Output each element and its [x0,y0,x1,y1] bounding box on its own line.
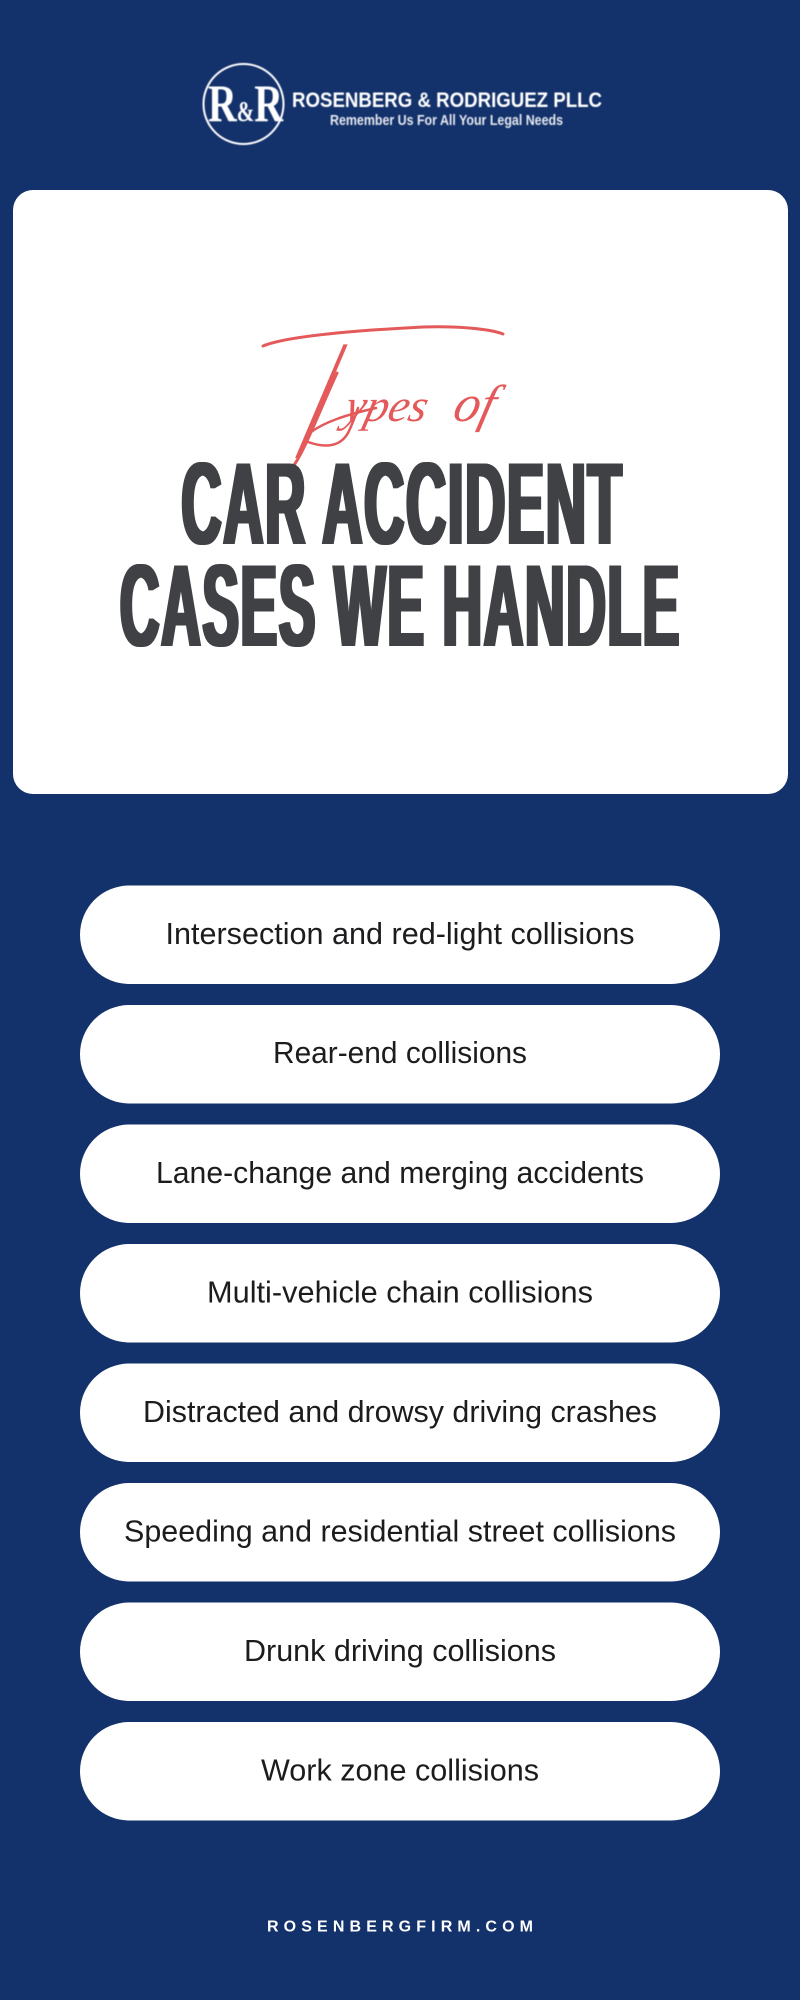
pill: distracted [80,1364,720,1462]
pill: drunk driving: Drunk driving collisions [244,1633,556,1668]
pill: work zone [80,1722,720,1820]
pill: lane-change [80,1124,720,1223]
pill: speeding [80,1483,720,1582]
decorative swash across the script heading [263,327,503,465]
firm name: ROSENBERG & RODRIGUEZ PLLC [292,89,602,112]
pill: intersection: Intersection and red-light collisions [166,916,634,951]
list of accident case types [80,886,720,1820]
pill: distracted: Distracted and drowsy driving crashes [143,1394,657,1429]
script heading: Types of: ypes [336,381,434,432]
pill: lane-change: Lane-change and merging accidents [156,1155,644,1190]
pill: speeding: Speeding and residential street collisions [124,1514,676,1548]
logo emblem: R&R circle [204,64,284,144]
logo emblem: R&R circle: R&R [208,75,284,133]
pill: intersection [80,886,720,984]
pill: multi-vehicle: Multi-vehicle chain collisions [207,1274,593,1310]
pill: rear-end: Rear-end collisions [273,1035,527,1070]
script heading: Types of: of [448,376,509,433]
pill: multi-vehicle [80,1244,720,1342]
firm tagline: Remember Us For All Your Legal Needs [330,112,563,129]
pill: rear-end [80,1005,720,1104]
main heading [120,438,681,671]
logo: Rosenberg & Rodriguez PLLC [204,64,602,144]
title card panel [13,190,788,794]
pill: drunk driving [80,1602,720,1701]
footer website: ROSENBERGFIRM.COM [267,1918,533,1936]
pill: work zone: Work zone collisions [261,1752,539,1788]
script heading: Types of: T [237,292,411,507]
